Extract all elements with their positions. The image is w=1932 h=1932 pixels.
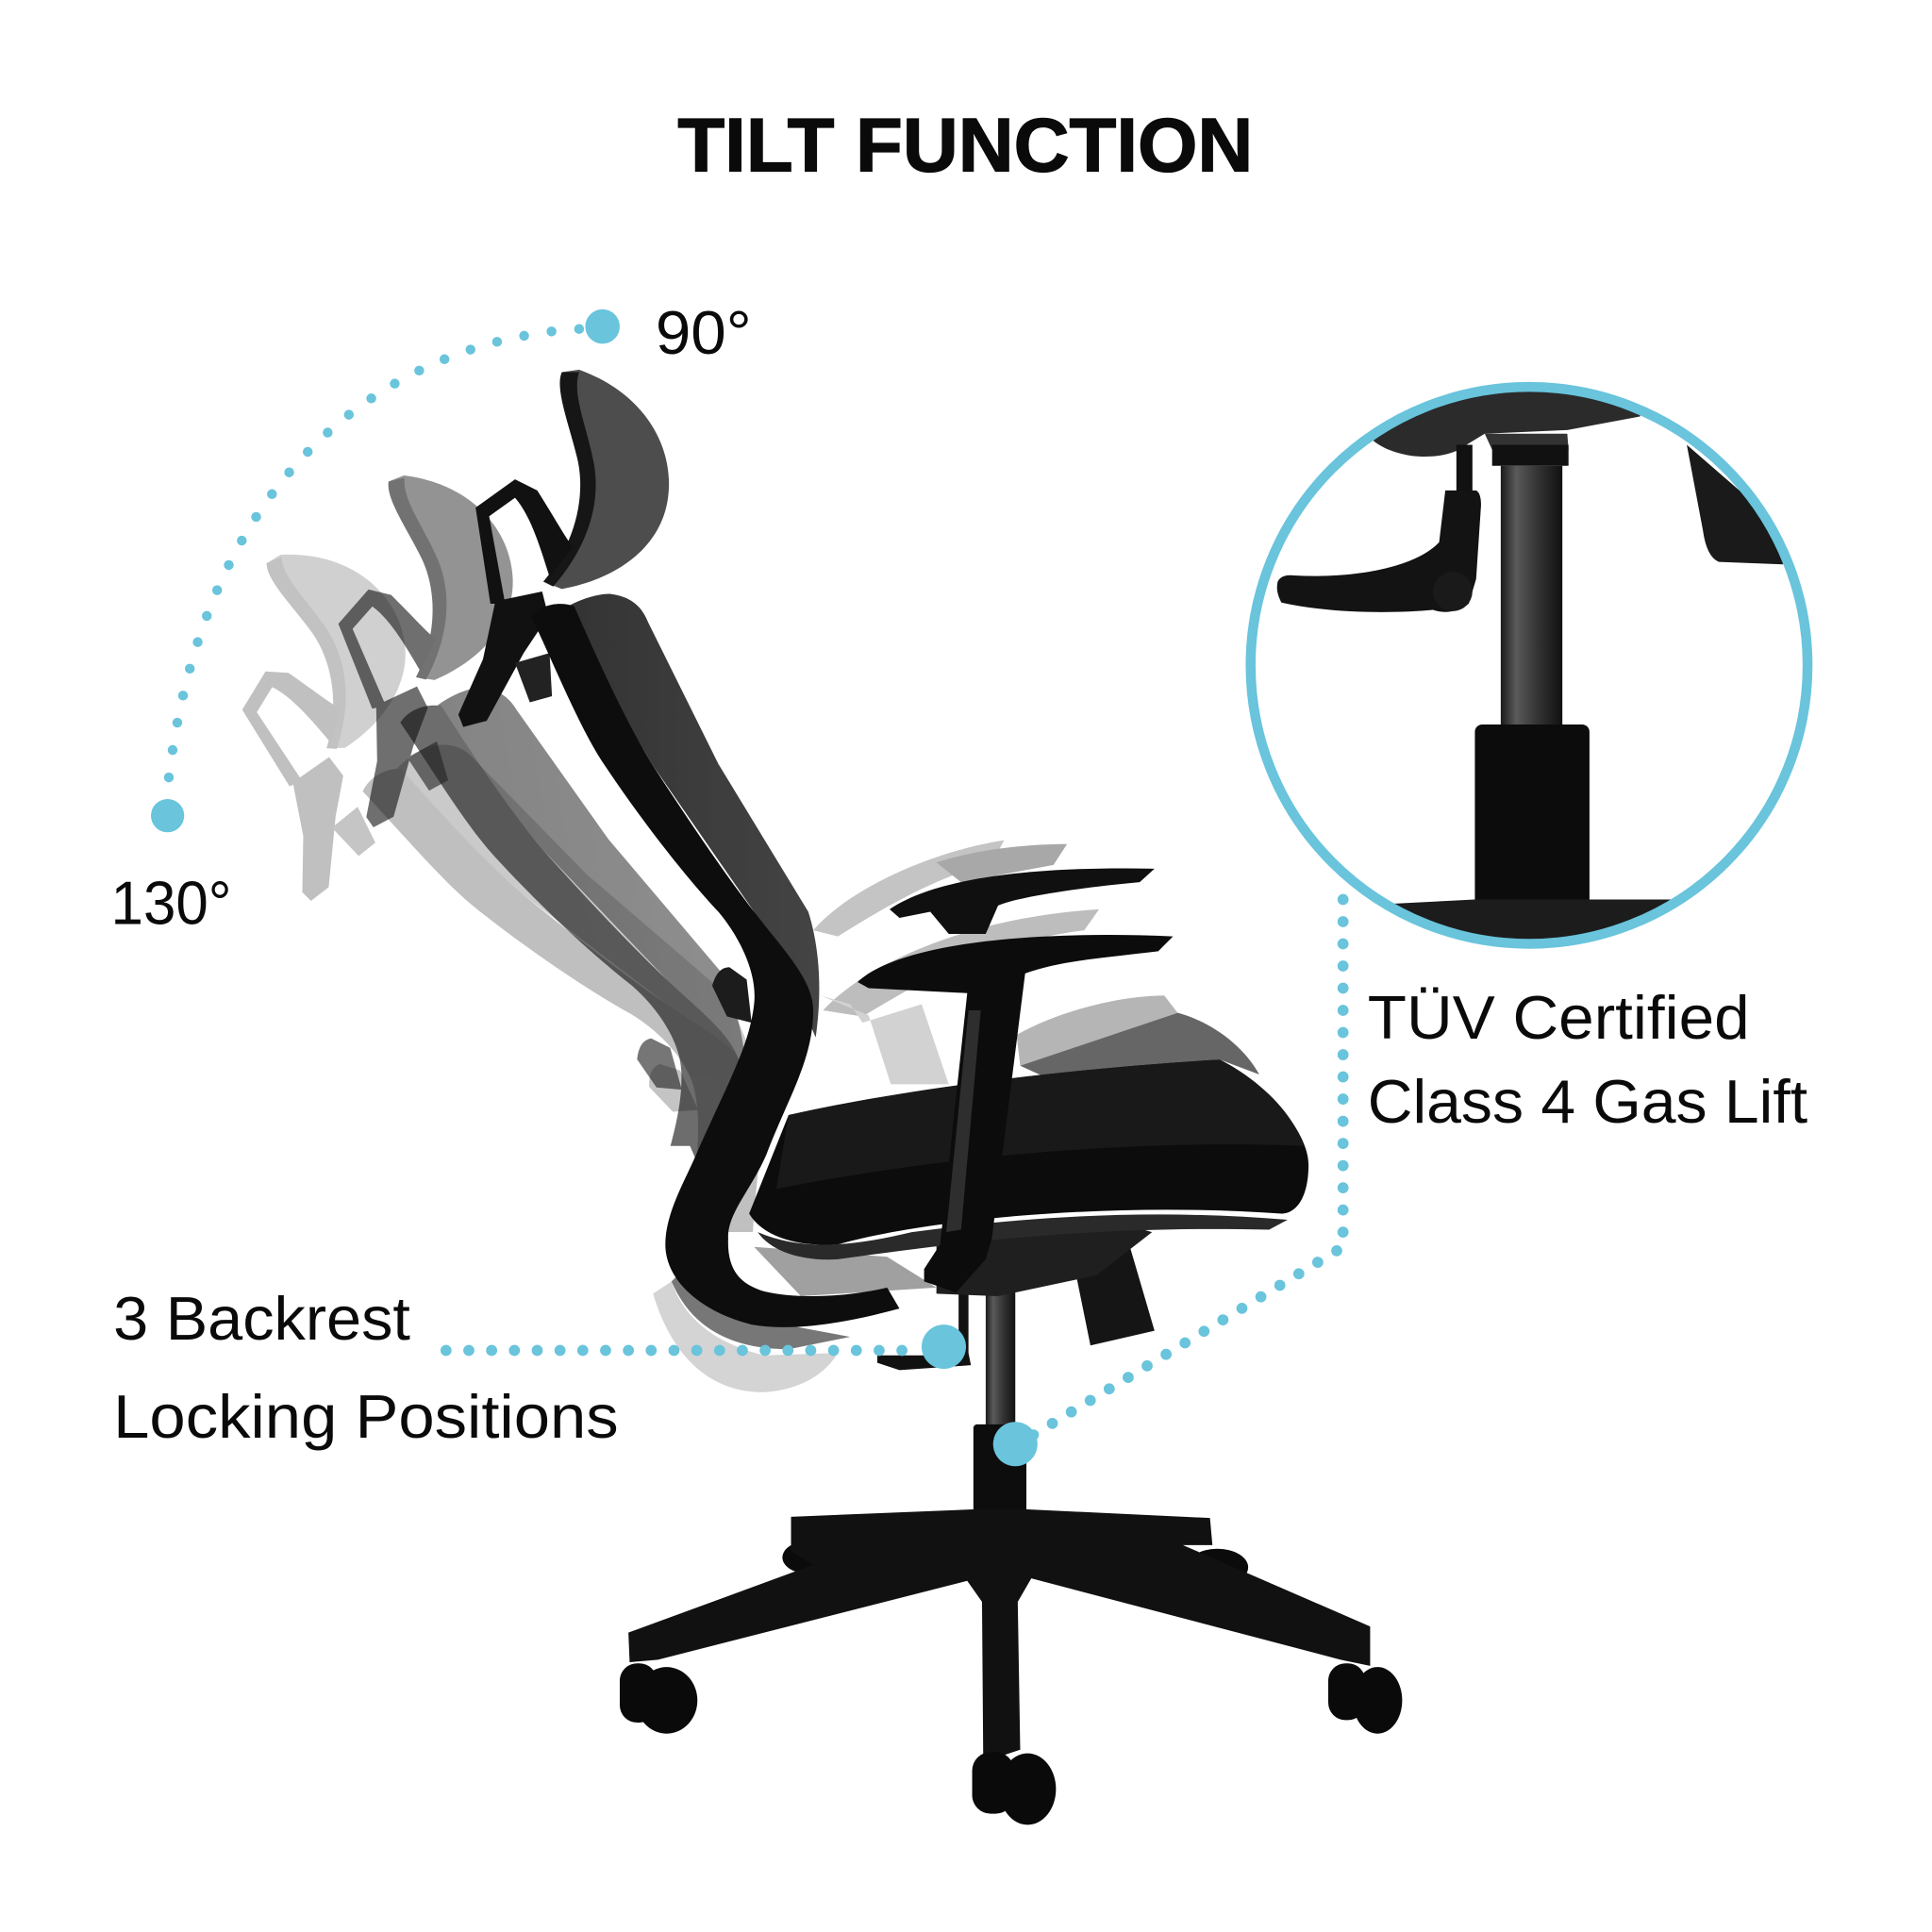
- 90 degree label: 90°: [656, 298, 752, 367]
- headrest: 90 degree position: [458, 370, 669, 727]
- lever knob: [1452, 591, 1473, 611]
- gas lift label: TÜV Certified: [1368, 983, 1750, 1052]
- gas lift detail circle: [1251, 370, 1807, 961]
- backrest locking label: Locking Positions: [113, 1382, 619, 1451]
- 130 degree label: 130°: [111, 869, 232, 938]
- 90 degree marker: [585, 309, 620, 343]
- gas lift dotted line: [1033, 899, 1343, 1436]
- ghost headrest: middle position: [293, 457, 562, 828]
- rear armrest: [890, 868, 1155, 934]
- office chair: [458, 370, 1402, 1824]
- seat mechanism: [754, 1247, 937, 1296]
- backrest locking marker: [922, 1324, 966, 1369]
- gas lift marker: [993, 1422, 1038, 1466]
- ghost backrest: middle position: [400, 689, 743, 1158]
- infographic canvas: [115, 117, 1813, 1824]
- five star base: [628, 1509, 1370, 1762]
- 130 degree marker: [151, 799, 184, 832]
- gas lift piston: [986, 1288, 1015, 1429]
- gas lift cylinder: [974, 1424, 1026, 1523]
- tilt tension knob: [1074, 1239, 1155, 1345]
- seat cushion: [749, 1059, 1308, 1245]
- detail contents: [1277, 391, 1783, 940]
- 90 degree arc dotted line: [168, 329, 579, 789]
- gas lift label: Class 4 Gas Lift: [1368, 1067, 1807, 1136]
- armrest post fragment: [1687, 445, 1783, 564]
- caster: back right: [1187, 1549, 1248, 1586]
- caster: right: [1328, 1663, 1402, 1734]
- detail ring: [1251, 387, 1807, 943]
- ghost armrests and seat: [653, 841, 1259, 1392]
- backrest locking label: 3 Backrest: [113, 1284, 410, 1353]
- ghost backrest: 130 degree position: [362, 745, 758, 1232]
- backrest locking dotted line: [446, 1346, 924, 1355]
- front armrest post highlight: [946, 1010, 981, 1232]
- seat top face: [776, 1059, 1304, 1189]
- backrest: 90 degree position: [531, 594, 899, 1327]
- caster: front: [973, 1752, 1056, 1824]
- ghost headrest: 130 degree position: [177, 523, 486, 903]
- title: TILT FUNCTION: [677, 104, 1253, 189]
- front armrest: [858, 935, 1173, 1292]
- seat pan: [758, 1214, 1288, 1259]
- caster: left: [620, 1663, 697, 1734]
- height lever: [877, 1293, 971, 1370]
- caster: back left: [782, 1541, 832, 1574]
